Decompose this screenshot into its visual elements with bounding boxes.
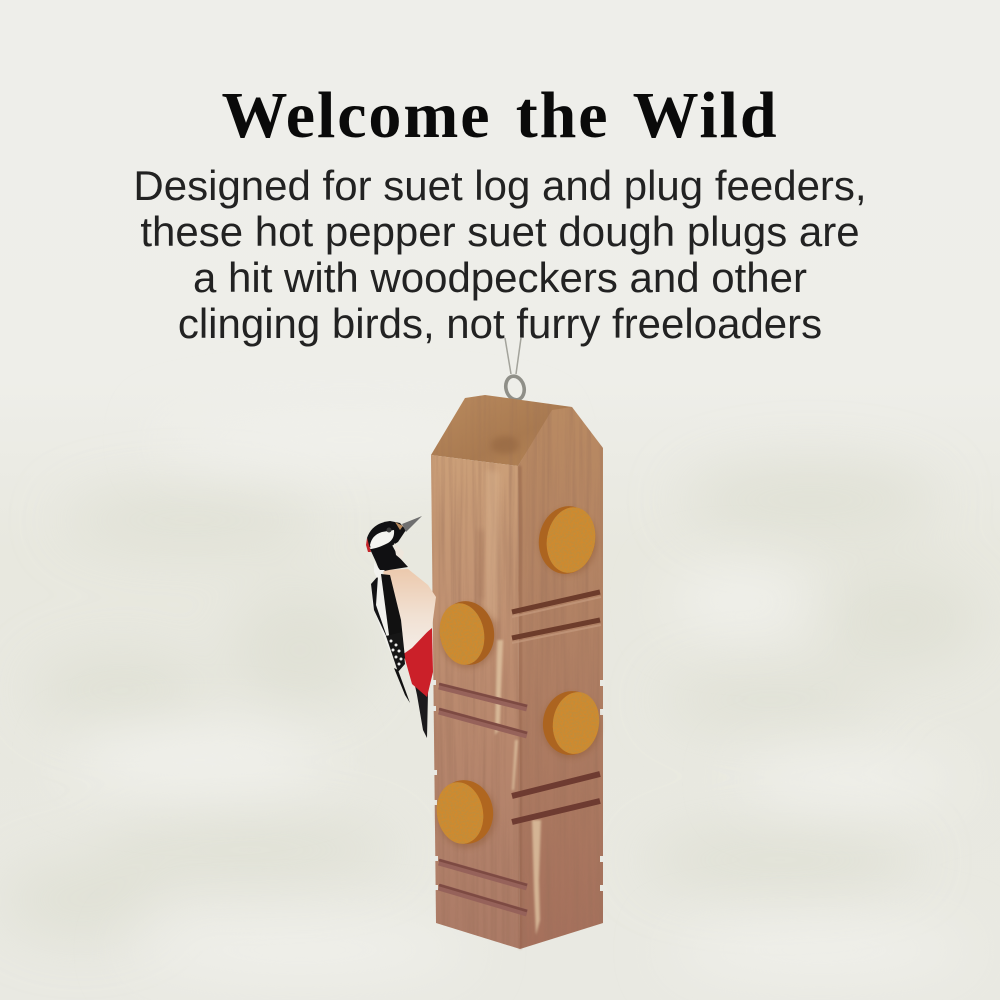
head [367, 521, 406, 549]
body text: a hit with woodpeckers and other [193, 254, 807, 301]
breast [383, 569, 436, 655]
tail [412, 672, 428, 738]
neck stripe [370, 545, 408, 572]
body text: these hot pepper suet dough plugs are [140, 208, 860, 255]
notches [430, 680, 605, 891]
title: Welcome the Wild [222, 79, 778, 152]
grooves: right face [512, 592, 601, 822]
wooden feeder body [430, 395, 605, 949]
plug 1 [534, 502, 600, 578]
left face [431, 455, 520, 949]
body text: Designed for suet log and plug feeders, [133, 162, 867, 209]
roof [431, 395, 572, 466]
icon: woodpecker [366, 516, 436, 738]
corner shading [518, 466, 522, 949]
red belly [403, 628, 433, 697]
grooves: left face [439, 684, 527, 913]
plug 3 [539, 687, 603, 759]
spotted lower wing [386, 632, 405, 672]
body text [133, 162, 867, 347]
pale heartwood streaks [495, 640, 541, 935]
icon: hanging wire and eye hook [503, 338, 527, 402]
body text: clinging birds, not furry freeloaders [178, 300, 822, 347]
beak [402, 516, 422, 532]
plug 2 [435, 597, 499, 669]
plug 4 [432, 776, 498, 848]
right face [518, 407, 603, 949]
suet plugs [432, 502, 603, 848]
white scapular and wing [371, 572, 397, 668]
